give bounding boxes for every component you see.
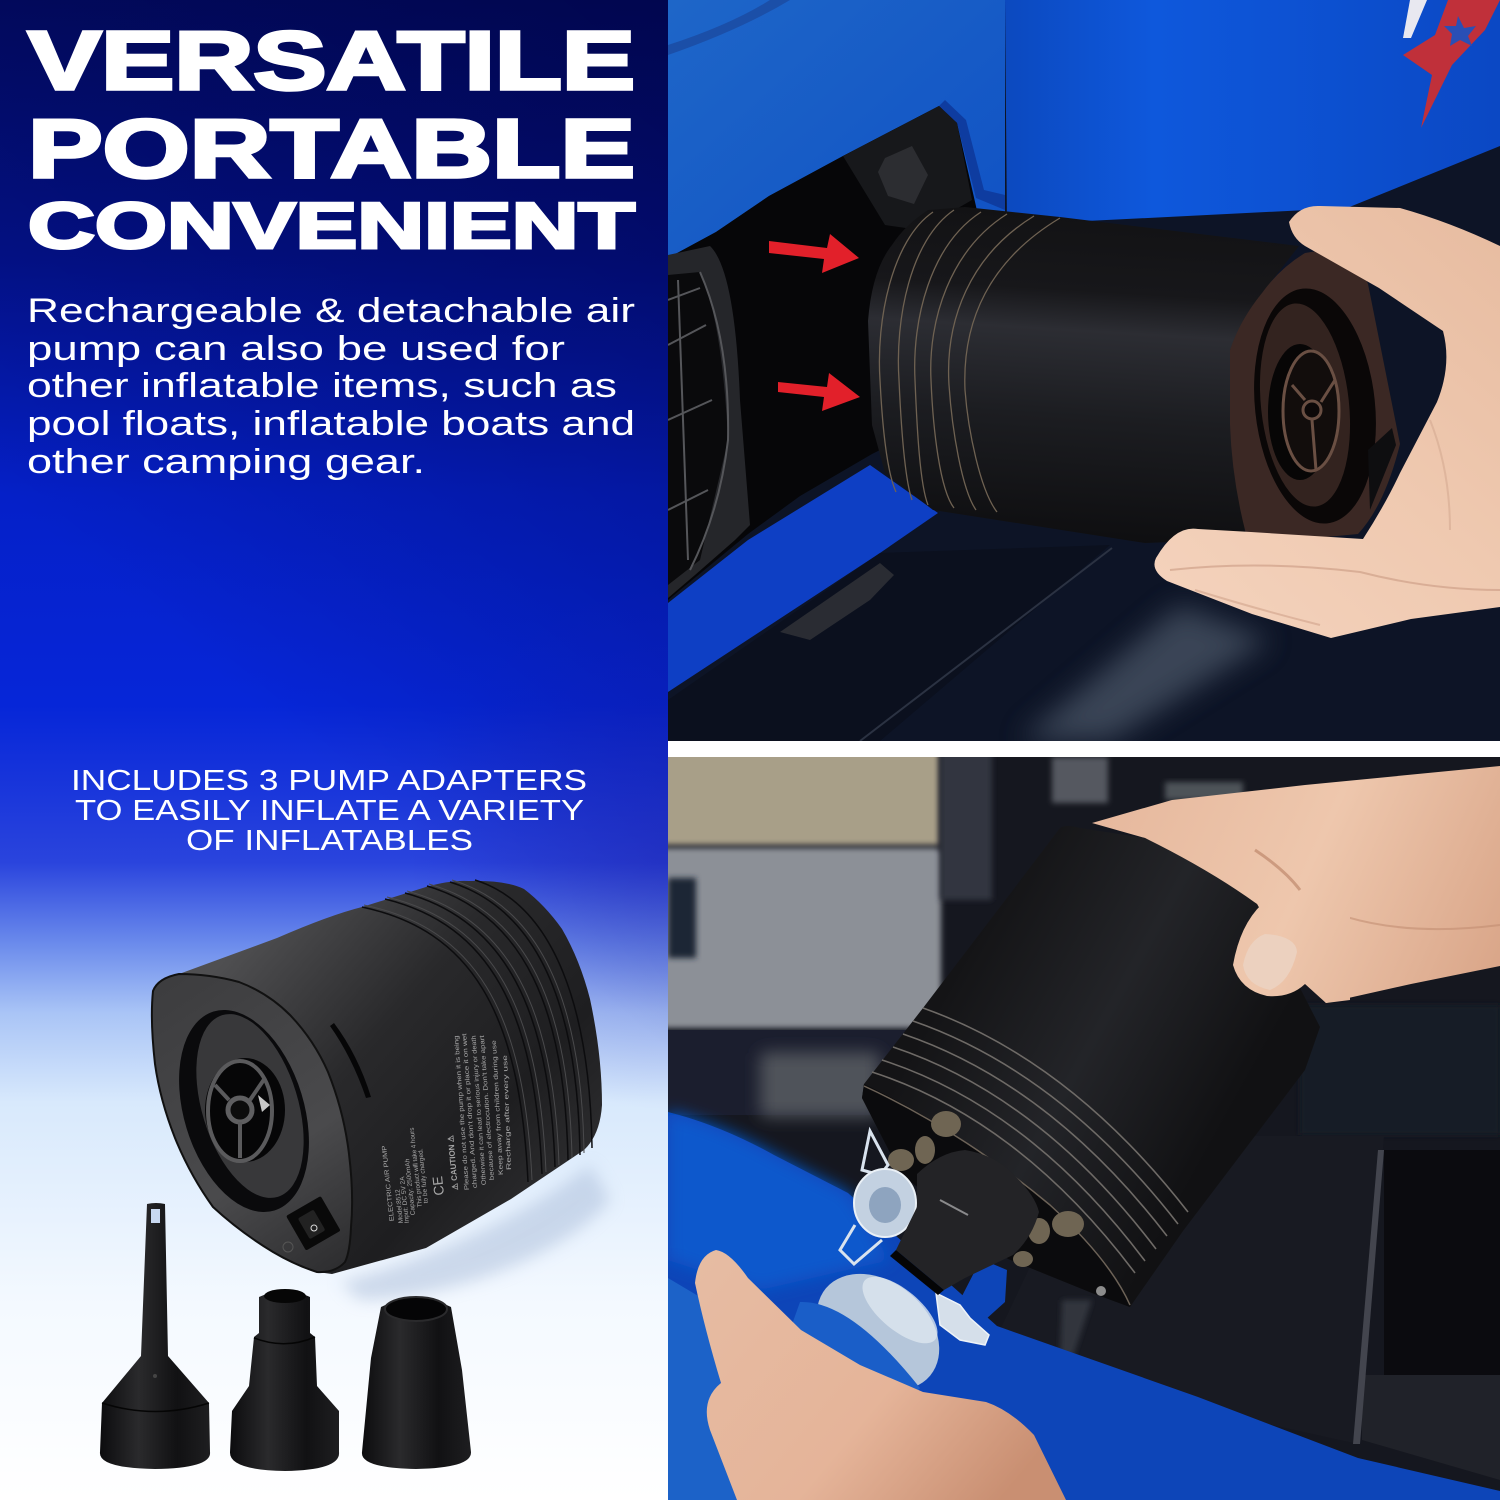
photo: pump inflating a blue inflatable (660, 750, 1500, 1500)
photo: pump inserted into inflatable seat (668, 0, 1500, 741)
opening in seat (668, 106, 978, 600)
title (28, 14, 635, 262)
description text: other camping gear. (27, 443, 425, 481)
adapters caption: INCLUDES 3 PUMP ADAPTERS (71, 765, 587, 797)
icon: red arrows (769, 234, 860, 411)
product: air pump (152, 880, 610, 1300)
pump label text: because of electrocution. Don't take apart (479, 1035, 496, 1180)
blurred cabin background (660, 750, 1500, 1480)
hand: upper fingers (1092, 766, 1500, 1003)
pump label text: ELECTRIC AIR PUMP (381, 1145, 396, 1222)
adapters caption (71, 765, 587, 857)
title: PORTABLE (28, 102, 635, 195)
velcro strap (780, 563, 894, 640)
grille frame (668, 246, 750, 598)
hand: holding pump (1154, 206, 1500, 638)
hand: thumb (1233, 850, 1350, 1003)
blue inflatable (668, 1112, 1500, 1500)
pump label text: to be fully charged. (417, 1148, 430, 1204)
adapter nozzle (890, 1150, 1039, 1295)
adapters caption: OF INFLATABLES (186, 825, 473, 857)
pump label text: Please do not use the pump when it is being (453, 1035, 471, 1190)
pump label text: This product will take 4 hours (409, 1127, 424, 1208)
adapters caption: TO EASILY INFLATE A VARIETY (75, 795, 584, 827)
description text: Rechargeable & detachable air (27, 292, 635, 330)
pump label text: Recharge after every use (502, 1054, 513, 1170)
pump label text: Capacity: 2500mAh (404, 1158, 417, 1216)
pump held upside down (862, 826, 1320, 1307)
pump label text: Model:8512 (394, 1189, 405, 1224)
description text: other inflatable items, such as (27, 367, 617, 405)
title: VERSATILE (28, 14, 635, 107)
hand: lower left (695, 1250, 1066, 1500)
description text (27, 292, 635, 481)
star logo (1403, 0, 1500, 128)
pump label text (381, 1033, 513, 1224)
lower clear valve (818, 1274, 990, 1386)
floor (668, 545, 1110, 741)
upper clear valve (840, 1131, 916, 1264)
divider: white gap between photos (668, 741, 1500, 757)
pump label text: charged. And don't drop it or place it on wet (461, 1033, 479, 1188)
description text: pool floats, inflatable boats and (27, 405, 635, 443)
pump face (1230, 248, 1400, 539)
pump label text: CE (429, 1175, 447, 1196)
pump body (868, 207, 1299, 543)
product: cone adapter (362, 1297, 471, 1469)
pump label text: Otherwise it can lead to serious injury or death (471, 1035, 488, 1185)
title: CONVENIENT (28, 189, 635, 262)
panel: blue gradient background (0, 0, 668, 1500)
pump label text: Input: DC 5V 2A (399, 1175, 411, 1224)
blue cloth (790, 1302, 920, 1395)
lower blue strip (668, 465, 938, 692)
description text: pump can also be used for (27, 330, 565, 368)
pump label text: Keep away from children during use (491, 1040, 505, 1175)
right seat panel (1005, 0, 1500, 225)
product: stepped adapter (230, 1289, 339, 1471)
pump label text: ⚠ CAUTION ⚠ (446, 1135, 460, 1191)
left seat panel (668, 0, 1005, 255)
product: needle adapter (100, 1203, 210, 1469)
